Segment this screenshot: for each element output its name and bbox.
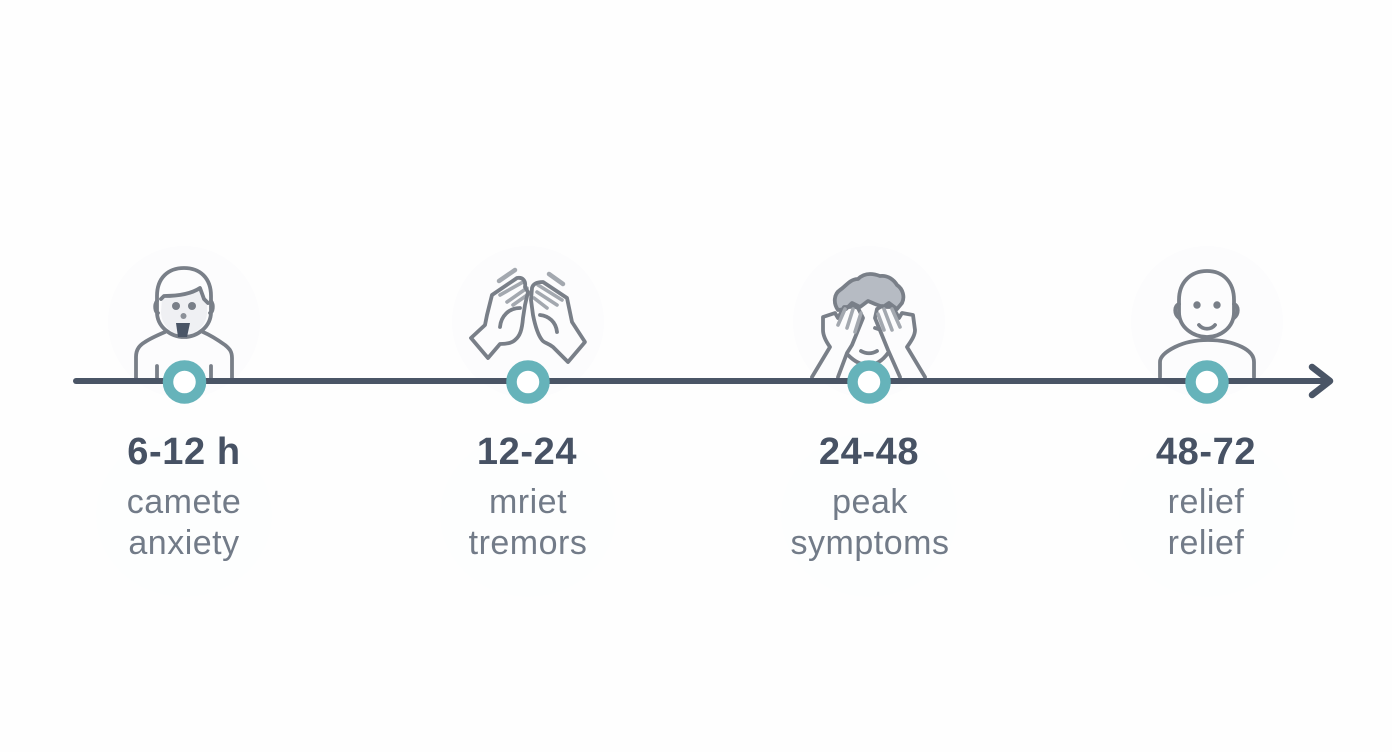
text: stage 1: anxiety [128,524,240,562]
text: stage 1: camete [127,483,241,521]
text: stage 3 [791,431,949,562]
text: stage 1: 6-12 h [127,431,241,473]
panel: stage 2 backdrop [440,246,616,597]
icon: anxious person [136,268,232,378]
text: stage 2: mriet [489,483,567,521]
timeline axis with arrow [76,367,1330,395]
text: stage 4: 48-72 [1156,431,1256,473]
text: stage 1 [127,431,241,562]
panel: stage 3 backdrop [781,246,957,597]
text: stage 3: 24-48 [819,431,919,473]
marker: stage 1 [168,366,201,398]
text: stage 2: tremors [469,524,587,562]
text: stage 4: relief [1168,483,1244,521]
panel: stage 4 backdrop [1119,246,1295,597]
text: stage 3: peak [832,483,908,521]
icon: trembling hands [471,270,585,362]
text: stage 3: symptoms [791,524,949,562]
icon: relieved person [1160,271,1254,377]
marker: stage 3 [852,366,886,398]
icon: person covering eyes [812,274,925,377]
marker: stage 2 [512,366,544,398]
text: stage 2 [469,431,587,562]
text: stage 4: relief [1168,524,1244,562]
marker: stage 4 [1190,366,1224,398]
text: stage 2: 12-24 [477,431,577,473]
text: stage 4 [1156,431,1256,562]
panel: stage 1 backdrop [96,246,272,597]
